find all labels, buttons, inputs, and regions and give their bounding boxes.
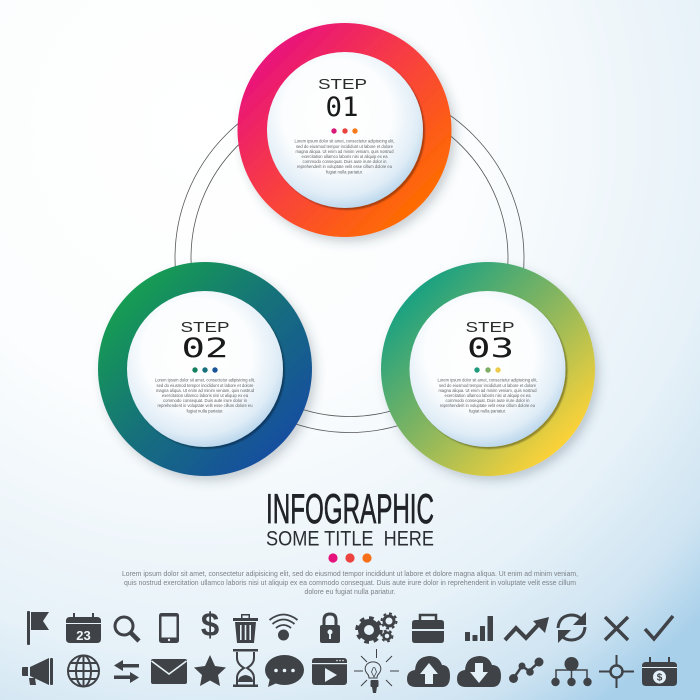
icon: calendar 23: [66, 613, 101, 643]
panel: step 03: [381, 262, 595, 476]
icon: light bulb: [354, 649, 399, 693]
panel: step 02: reprehenderit in voluptate velit esse cillum dolore eu: [158, 403, 253, 408]
panel: step 02: Lorem ipsum dolor sit amet, consectetur adipisicing elit,: [155, 378, 255, 383]
panel: step 02: exercitation ullamco laboris nisi ut aliquip ex ea: [162, 393, 248, 398]
icon: gears: [357, 614, 396, 642]
icon: trash: [233, 614, 258, 643]
panel: step 03: magna aliqua. Ut enim ad minim veniam, quis nostrud: [438, 388, 537, 393]
icon: crosshair: [599, 655, 634, 688]
subtitle: SOME TITLE HERE: [266, 526, 434, 550]
panel: step 02: magna aliqua. Ut enim ad minim veniam, quis nostrud: [156, 388, 254, 393]
panel: step 03: sed do eiusmod tempor incididunt ut labore et dolore: [439, 383, 536, 388]
icon: trend arrow: [505, 617, 549, 640]
panel: step 02: fugiat nulla pariatur.: [186, 408, 224, 414]
icon: swap arrows: [114, 660, 139, 683]
panel: step 03: commodo consequat. Duis aute irure dolor in: [446, 398, 530, 403]
icon: phone: [159, 613, 179, 643]
panel: step 03: 03: [467, 333, 514, 364]
icon: close: [605, 617, 628, 640]
icon: signal bars: [465, 616, 493, 641]
title dots: [328, 553, 372, 563]
panel: step 01: STEP: [318, 76, 367, 93]
panel: step 03: Lorem ipsum dolor sit amet, consectetur adipisicing elit,: [438, 378, 538, 383]
description text: dolore eu fugiat nulla pariatur.: [304, 587, 396, 596]
panel: step 01: commodo consequat. Duis aute irure dolor in: [302, 159, 387, 164]
icon: star: [194, 655, 226, 686]
panel: step 01: Lorem ipsum dolor sit amet, consectetur adipisicing elit,: [294, 139, 394, 144]
icon: org chart: [551, 657, 592, 686]
icon: dollar: $: [201, 606, 219, 643]
icon: wifi: [270, 614, 298, 640]
panel: step 02: commodo consequat. Duis aute irure dolor in: [163, 398, 247, 403]
icon: line nodes: [509, 658, 544, 683]
icon: video window: [312, 658, 347, 685]
panel: step 01: [238, 23, 452, 237]
panel: step 03: STEP: [466, 319, 514, 336]
title: INFOGRAPHIC: [266, 485, 434, 532]
icon: chat bubble: [265, 655, 304, 687]
panel: step 01: fugiat nulla pariatur.: [326, 170, 363, 174]
panel: step 03: exercitation ullamco laboris nisi ut aliquip ex ea: [444, 393, 531, 398]
panel: step 01: 01: [326, 92, 358, 123]
panel: step 02: 02: [182, 333, 228, 364]
icon: cloud upload: [407, 656, 450, 687]
panel: step 02: [98, 262, 312, 476]
panel: step 01: magna aliqua. Ut enim ad minim veniam, quis nostrud: [296, 149, 394, 154]
description text: [122, 569, 578, 596]
panel: step 02: STEP: [180, 319, 230, 336]
description text: quis nostrud exercitation ullamco laboris nisi ut aliquip ex ea commodo consequat. Duis aute irure dolor in reprehenderit in voluptate velit esse cillum: [124, 578, 576, 587]
description text: Lorem ipsum dolor sit amet, consectetur adipisicing elit, sed do eiusmod tempor incididunt ut labore et dolore magna aliqua. Ut enim ad minim veniam,: [122, 569, 578, 578]
icon: calendar dollar: $: [657, 672, 663, 684]
icon: briefcase: [412, 615, 444, 643]
icon: lock: [320, 614, 340, 643]
icon: cloud download: [457, 656, 501, 687]
panel: step 01: sed do eiusmod tempor incididunt ut labore et dolore: [296, 144, 393, 149]
panel: step 03: reprehenderit in voluptate velit esse cillum dolore eu: [440, 403, 535, 408]
panel: step 01: reprehenderit in voluptate velit esse cillum dolore eu: [297, 164, 392, 169]
icon: search: [115, 617, 139, 641]
icon: calendar dollar: [642, 657, 677, 686]
icon: mail: [151, 659, 187, 684]
connecting rings: [175, 84, 524, 432]
panel: step 01: exercitation ullamco laboris nisi ut aliquip ex ea: [302, 154, 388, 159]
icon: hourglass: [233, 649, 258, 687]
icon: megaphone: [22, 658, 53, 685]
panel: step 02: sed do eiusmod tempor incididunt ut labore et dolore: [156, 383, 254, 388]
icon: calendar 23: 23: [76, 628, 91, 643]
icon: check: [645, 616, 673, 639]
panel: step 03: fugiat nulla pariatur.: [469, 408, 506, 414]
icon: flag: [27, 611, 49, 645]
icon: globe: [68, 655, 99, 687]
icon: refresh: [558, 612, 586, 643]
